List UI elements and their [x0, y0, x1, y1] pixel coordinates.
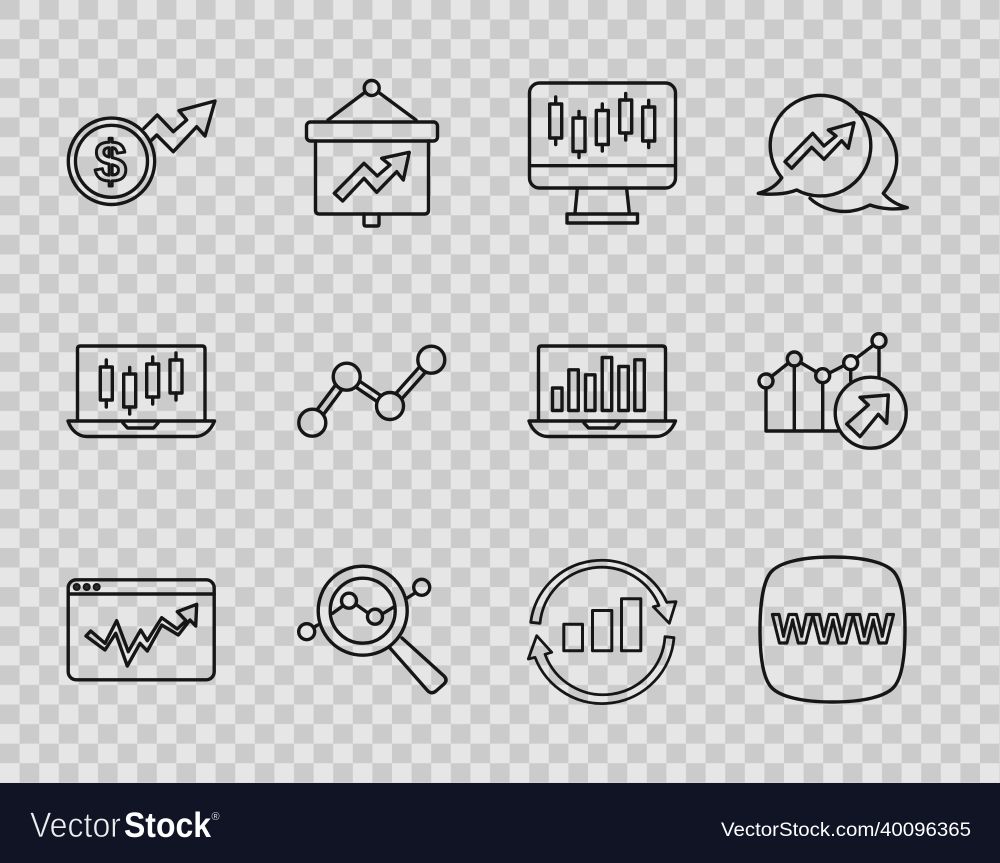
- candlesticks: [550, 94, 655, 158]
- bars: [564, 599, 641, 651]
- icon: growth graph with arrow badge: [759, 334, 906, 448]
- screen divider: [530, 164, 675, 167]
- window: [68, 580, 214, 680]
- notch: [123, 423, 158, 428]
- lens inner: [330, 578, 395, 643]
- icon: desktop monitor with candlesticks: [530, 83, 676, 223]
- front bubble: [758, 95, 871, 196]
- screen: [78, 346, 205, 420]
- base: [567, 214, 638, 223]
- coin inner ring: [76, 125, 148, 197]
- lens outer: [318, 566, 407, 655]
- data nodes: [759, 374, 773, 388]
- outer nodes: [414, 579, 430, 595]
- hanging strings: [328, 93, 416, 120]
- squircle: [760, 557, 905, 702]
- inner nodes: [342, 593, 356, 608]
- hanging pin: [364, 80, 379, 96]
- data nodes: [299, 409, 326, 436]
- image id: VectorStock.com/40096365: [721, 820, 971, 841]
- lower arrow: [528, 636, 674, 704]
- icon: dollar coin with rising arrow: [68, 101, 215, 204]
- screen: [530, 83, 676, 188]
- fluctuating arrow: [86, 604, 197, 666]
- board: [316, 141, 428, 214]
- columns and base: [766, 348, 879, 431]
- stand: [575, 189, 629, 213]
- window dots: [74, 584, 100, 590]
- stem: [364, 214, 379, 226]
- title bar line: [68, 592, 214, 596]
- back bubble: [810, 112, 907, 212]
- connecting lines: [772, 346, 873, 376]
- chart arrow: [785, 123, 854, 168]
- connecting lines: [314, 593, 415, 628]
- chart arrow: [334, 152, 409, 201]
- coin outer ring: [68, 118, 155, 204]
- icon: refresh arrows around bar chart: [528, 560, 676, 704]
- icon: browser window with fluctuating arrow: [68, 580, 214, 680]
- notch: [584, 423, 619, 428]
- icon: presentation board with arrow: [306, 80, 438, 226]
- icon: connected line graph: [299, 346, 445, 436]
- badge circle: [835, 377, 906, 448]
- connectors: [317, 367, 425, 414]
- icon: magnifier with data points: [299, 566, 446, 693]
- icon: laptop with candlesticks: [68, 346, 214, 436]
- candlesticks: [100, 353, 182, 414]
- dollar sign: $: [94, 130, 127, 194]
- registered mark: ®: [212, 811, 220, 823]
- top bar: [306, 122, 438, 141]
- base: [529, 421, 676, 436]
- logo wordmark: Stock: [124, 806, 211, 845]
- rising arrow: [144, 101, 215, 152]
- badge arrow: [847, 395, 888, 437]
- icon: www rounded square: [760, 557, 905, 702]
- bars: [552, 358, 644, 410]
- www text: www: [772, 595, 894, 655]
- base: [68, 421, 214, 436]
- handle: [390, 638, 446, 693]
- icon: chat bubbles with arrow: [758, 95, 907, 212]
- upper arrow: [531, 560, 676, 623]
- icon: laptop with bar chart: [529, 346, 676, 436]
- footer bar: [0, 783, 1000, 863]
- screen: [538, 346, 666, 420]
- logo wordmark: Vector: [30, 806, 121, 845]
